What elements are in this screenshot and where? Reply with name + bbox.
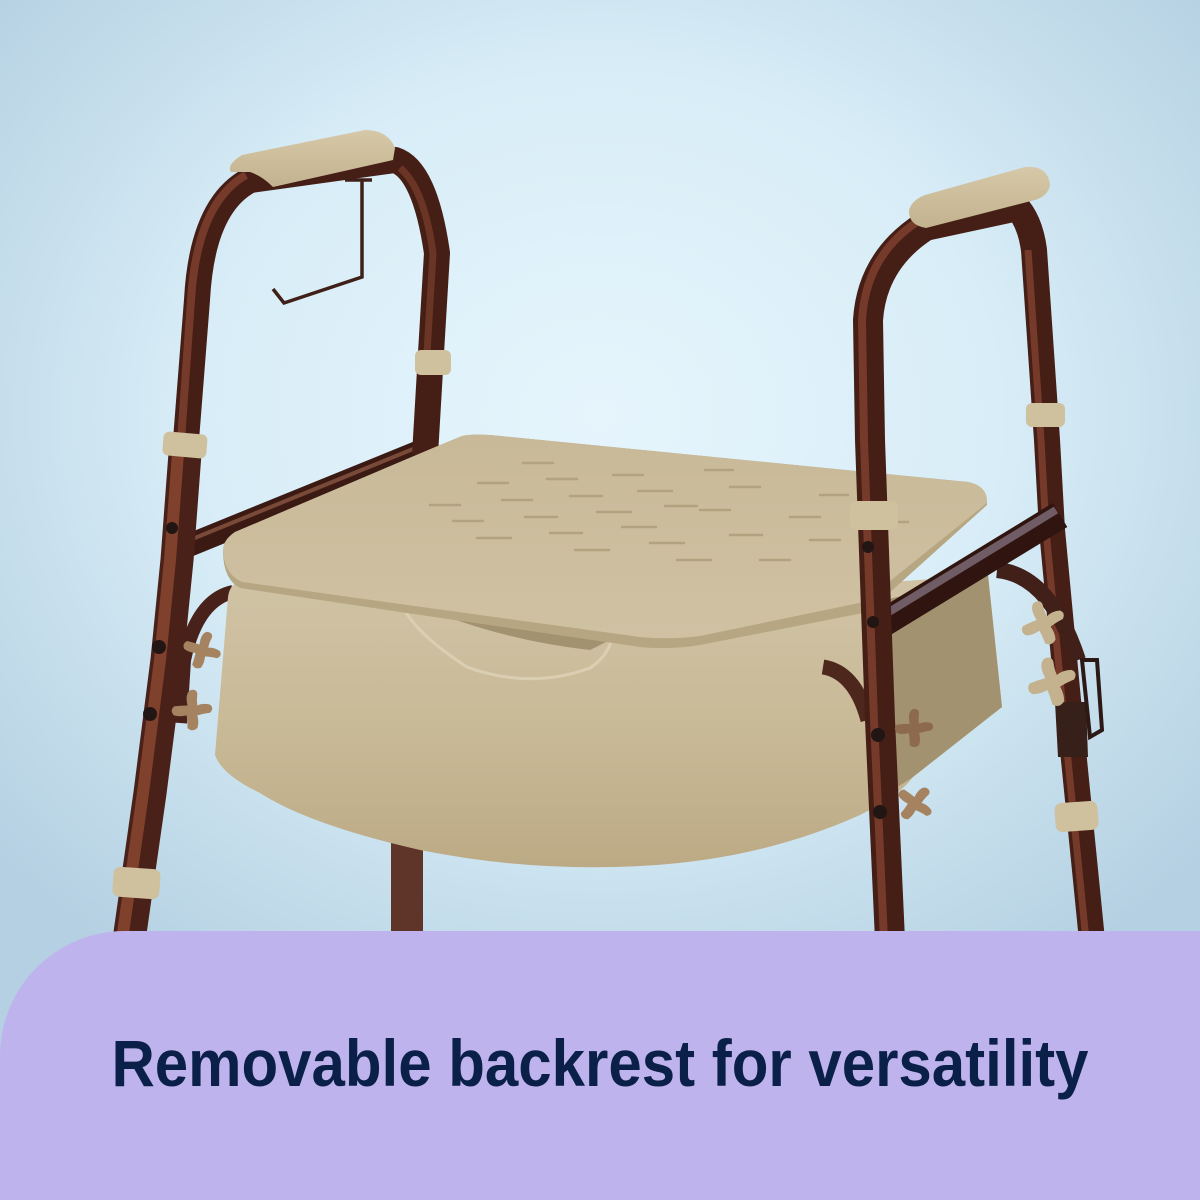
caption banner xyxy=(0,931,1200,1200)
right leg sleeve and bracket xyxy=(1055,660,1102,757)
frame rivets xyxy=(143,522,887,819)
caption text: Removable backrest for versatility xyxy=(111,1026,1089,1100)
rear centre leg xyxy=(391,840,423,940)
toilet paper holder xyxy=(273,180,372,303)
right frame rear tube xyxy=(997,205,1092,940)
star knobs xyxy=(172,594,1082,830)
adjustable clips xyxy=(112,350,1099,900)
arm pads xyxy=(230,130,1050,228)
perforated seat xyxy=(223,435,987,648)
right frame front tube and crossbar xyxy=(823,206,1060,940)
left frame xyxy=(122,160,437,940)
commode bucket xyxy=(215,575,1002,867)
